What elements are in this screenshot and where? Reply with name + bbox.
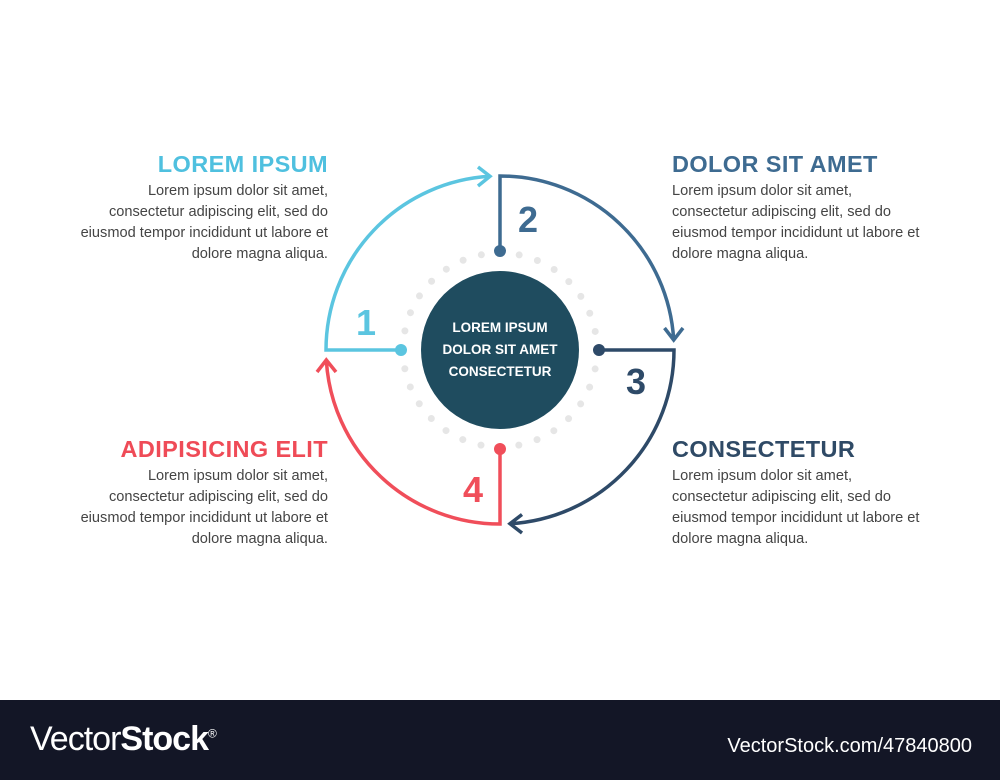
- text: consectetur: [672, 436, 920, 547]
- text: dolor sit amet: eiusmod tempor incididunt ut labore et: [672, 225, 919, 241]
- step 3 arrow: 3: [626, 361, 646, 402]
- text: lorem ipsum: consectetur adipiscing elit, sed do: [109, 204, 328, 220]
- text: dolor sit amet: DOLOR SIT AMET: [672, 151, 878, 177]
- step 3 arrow: [510, 344, 674, 533]
- text: dolor sit amet: consectetur adipiscing elit, sed do: [672, 204, 891, 220]
- text: consectetur: Lorem ipsum dolor sit amet,: [672, 468, 852, 484]
- text: adipisicing elit: consectetur adipiscing elit, sed do: [109, 489, 328, 505]
- step 4 arrow: [317, 360, 506, 524]
- footer logo: VectorStock®: [30, 720, 216, 758]
- text: adipisicing elit: eiusmod tempor incididunt ut labore et: [81, 510, 328, 526]
- text: dolor sit amet: Lorem ipsum dolor sit amet,: [672, 183, 852, 199]
- text: consectetur: consectetur adipiscing elit, sed do: [672, 489, 891, 505]
- footer url: VectorStock.com/47840800: [727, 735, 972, 757]
- footer: [0, 700, 1000, 780]
- step 4 arrow: 4: [463, 469, 483, 510]
- text: consectetur: CONSECTETUR: [672, 436, 855, 462]
- text: lorem ipsum: Lorem ipsum dolor sit amet,: [148, 183, 328, 199]
- step 1 arrow: 1: [356, 302, 376, 343]
- text: dolor sit amet: dolore magna aliqua.: [672, 246, 808, 262]
- step 1 arrow: [326, 167, 490, 356]
- text: consectetur: dolore magna aliqua.: [672, 531, 808, 547]
- center circle: CONSECTETUR: [449, 364, 552, 379]
- dotted ring: [403, 253, 597, 447]
- center circle: [421, 271, 579, 429]
- step 2 arrow: 2: [518, 199, 538, 240]
- text: lorem ipsum: [81, 151, 328, 262]
- text: adipisicing elit: ADIPISICING ELIT: [121, 436, 328, 462]
- text: consectetur: eiusmod tempor incididunt ut labore et: [672, 510, 919, 526]
- step 2 arrow: [494, 176, 683, 340]
- center circle: LOREM IPSUM: [452, 320, 548, 335]
- text: adipisicing elit: [81, 436, 328, 547]
- center circle: DOLOR SIT AMET: [442, 342, 558, 357]
- text: dolor sit amet: [672, 151, 920, 262]
- text: adipisicing elit: dolore magna aliqua.: [192, 531, 328, 547]
- text: adipisicing elit: Lorem ipsum dolor sit amet,: [148, 468, 328, 484]
- text: lorem ipsum: LOREM IPSUM: [158, 151, 328, 177]
- text: lorem ipsum: dolore magna aliqua.: [192, 246, 328, 262]
- text: lorem ipsum: eiusmod tempor incididunt ut labore et: [81, 225, 328, 241]
